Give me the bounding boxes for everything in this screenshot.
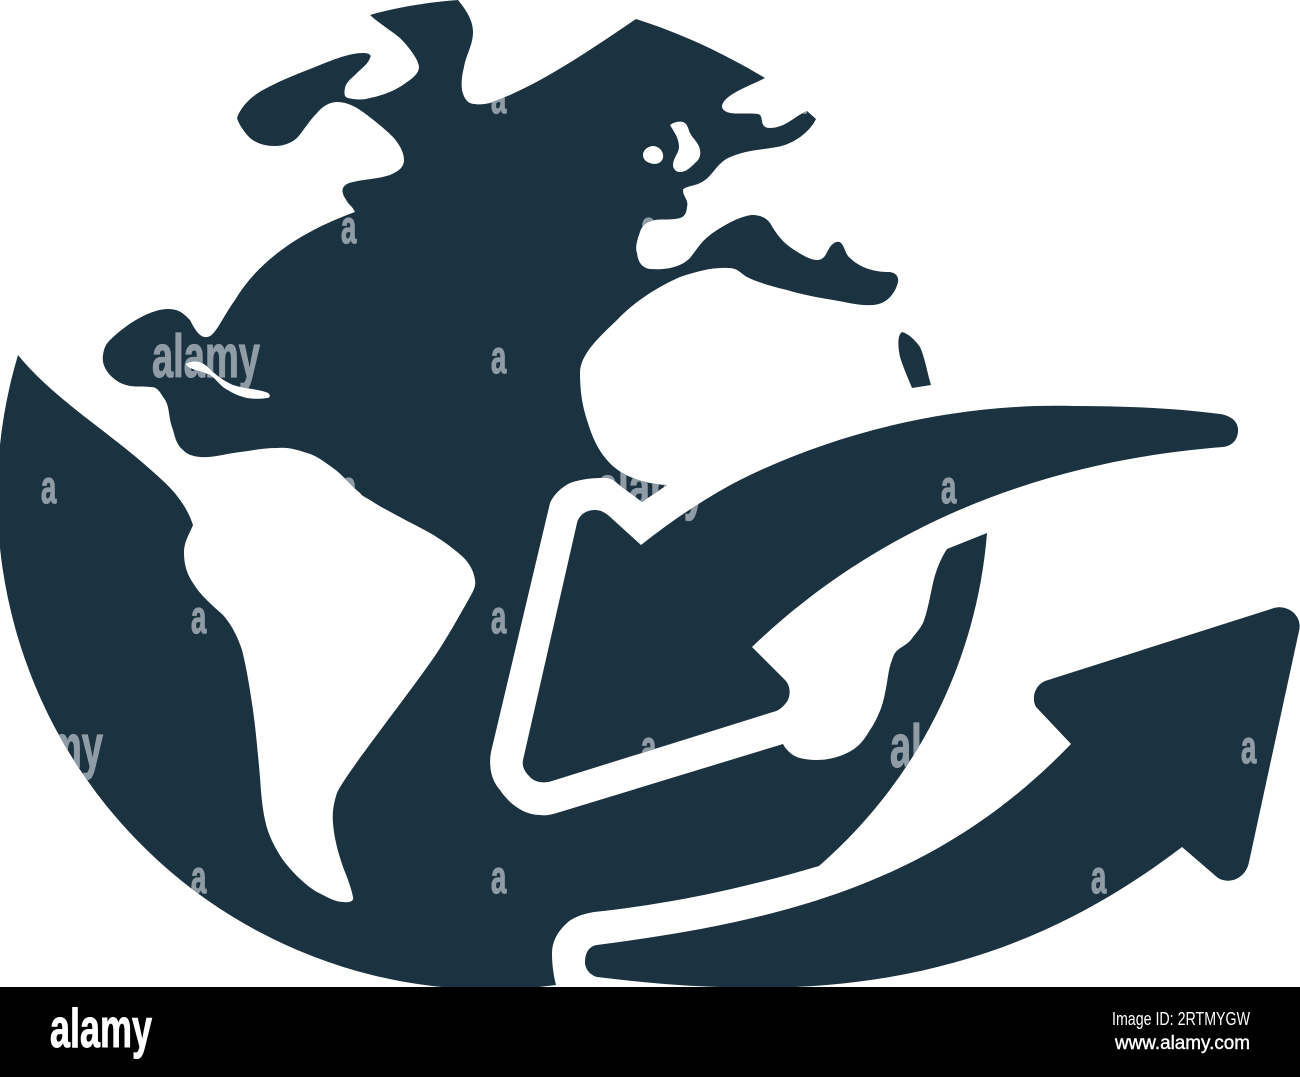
watermark: repeated alamy marks: a [41,463,57,514]
icon: small island [898,332,931,388]
watermark: repeated alamy marks: a [341,463,357,514]
watermark: repeated alamy marks: alamy [0,713,103,780]
website: www.alamy.com [1114,1033,1250,1054]
watermark: repeated alamy marks: alamy [597,454,705,521]
watermark: repeated alamy marks: a [491,593,507,644]
footer logo: alamy [50,997,152,1059]
watermark: repeated alamy marks: a [341,203,357,254]
image id: Image ID: 2RTMYGW [1112,1009,1250,1029]
watermark: repeated alamy marks: a [191,853,207,904]
watermark: repeated alamy marks: a [191,593,207,644]
watermark: repeated alamy marks: a [1241,723,1257,774]
watermark: repeated alamy marks: alamy [152,323,260,390]
footer bar [0,987,1300,1077]
watermark: repeated alamy marks: a [1091,853,1107,904]
arrow: outgoing arrow [585,607,1300,988]
watermark: repeated alamy marks: a [641,203,657,254]
arrow: incoming arrow [523,406,1238,782]
watermark: repeated alamy marks: a [491,73,507,124]
watermark: repeated alamy marks: alamy [890,713,998,780]
watermark: repeated alamy marks: a [491,853,507,904]
watermark: repeated alamy marks: a [491,333,507,384]
watermark: repeated alamy marks: a [791,73,807,124]
watermark: repeated alamy marks: a [641,723,657,774]
icon: globe with continents [0,0,987,989]
watermark: repeated alamy marks: a [941,463,957,514]
watermark: repeated alamy marks [0,73,1257,904]
